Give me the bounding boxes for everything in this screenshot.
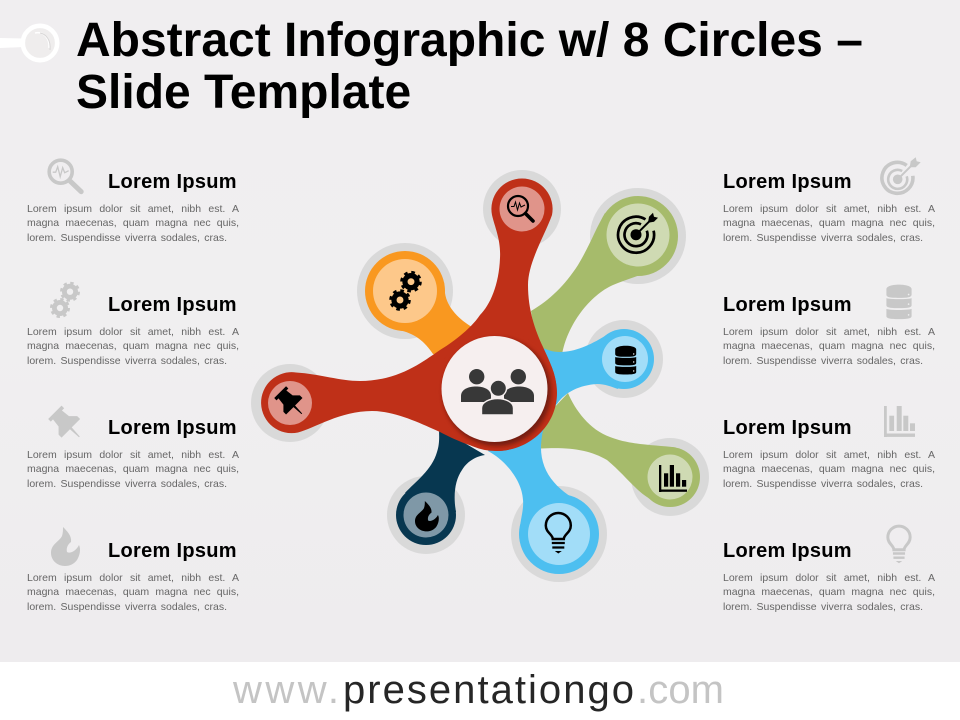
heading: Lorem Ipsum	[723, 540, 852, 562]
arm: green target	[531, 196, 678, 370]
panel: left item 3	[27, 406, 239, 490]
text block: magna maecenas, quam magna nec quis,	[27, 217, 239, 229]
arm: blue database	[540, 329, 654, 410]
text block: lorem. Suspendisse viverra sodales, cras.	[27, 354, 227, 366]
text block: magna maecenas, quam magna nec quis,	[723, 586, 935, 598]
icon: database	[886, 284, 912, 320]
footer: website address	[0, 662, 960, 720]
text block: Lorem ipsum dolor sit amet, nibh est. A	[27, 448, 239, 460]
text block: Lorem ipsum dolor sit amet, nibh est. A	[723, 202, 935, 214]
text block: lorem. Suspendisse viverra sodales, cras.	[723, 600, 923, 612]
heading: Lorem Ipsum	[723, 417, 852, 439]
text block: lorem. Suspendisse viverra sodales, cras.	[723, 232, 923, 244]
text block	[723, 572, 935, 612]
title	[76, 14, 863, 118]
footer: website address: .com	[637, 668, 724, 712]
heading: Lorem Ipsum	[723, 294, 852, 316]
heading: Lorem Ipsum	[723, 171, 852, 193]
text block: magna maecenas, quam magna nec quis,	[27, 586, 239, 598]
heading: Lorem Ipsum	[108, 294, 237, 316]
text block: magna maecenas, quam magna nec quis,	[27, 340, 239, 352]
panel: right item 1	[723, 158, 935, 244]
arm: navy flame	[396, 428, 485, 545]
text block: Lorem ipsum dolor sit amet, nibh est. A	[723, 326, 935, 338]
panel: left item 2	[27, 282, 239, 366]
panel: right item 4	[723, 524, 935, 612]
heading: Lorem Ipsum	[108, 171, 237, 193]
text block	[723, 202, 935, 244]
icon: pin	[48, 406, 80, 438]
center circle: team	[442, 336, 551, 446]
text block: Lorem ipsum dolor sit amet, nibh est. A	[27, 202, 239, 214]
panel: left item 1	[27, 158, 239, 244]
text block: lorem. Suspendisse viverra sodales, cras.	[723, 354, 923, 366]
halo circles	[251, 170, 709, 582]
title: Slide Template	[76, 66, 411, 118]
icon: target	[880, 158, 920, 196]
icon: gears	[50, 282, 80, 318]
text block: magna maecenas, quam magna nec quis,	[723, 217, 935, 229]
text block	[723, 448, 935, 490]
text block: Lorem ipsum dolor sit amet, nibh est. A	[723, 572, 935, 584]
text block: magna maecenas, quam magna nec quis,	[723, 463, 935, 475]
text block	[27, 326, 239, 366]
icon: magnifier ring pointer decoration	[0, 24, 60, 62]
text block	[27, 448, 239, 490]
panel: right item 2	[723, 284, 935, 366]
text block: lorem. Suspendisse viverra sodales, cras.	[27, 478, 227, 490]
heading: Lorem Ipsum	[108, 417, 237, 439]
icon: magnifier	[48, 158, 84, 194]
text block: lorem. Suspendisse viverra sodales, cras.	[723, 478, 923, 490]
text block: lorem. Suspendisse viverra sodales, cras.	[27, 600, 227, 612]
title: Abstract Infographic w/ 8 Circles –	[76, 14, 863, 66]
arm: green bar chart	[541, 393, 700, 507]
panel: right item 3	[723, 406, 935, 490]
text block	[723, 326, 935, 366]
text block: Lorem ipsum dolor sit amet, nibh est. A	[27, 326, 239, 338]
icon: bar chart	[884, 406, 915, 437]
text block: Lorem ipsum dolor sit amet, nibh est. A	[27, 572, 239, 584]
footer: website address: www.	[232, 668, 339, 712]
text block: Lorem ipsum dolor sit amet, nibh est. A	[723, 448, 935, 460]
arms: red magnifier and pin	[261, 178, 557, 451]
text block	[27, 202, 239, 244]
panel: left item 4	[27, 527, 239, 612]
icon: flame	[51, 527, 80, 566]
arm: orange gears	[365, 251, 472, 360]
icon: light bulb	[886, 524, 912, 563]
text block: magna maecenas, quam magna nec quis,	[723, 340, 935, 352]
arm: blue bulb	[488, 400, 599, 574]
footer: website address: presentationgo	[343, 668, 634, 712]
text block: magna maecenas, quam magna nec quis,	[27, 463, 239, 475]
text block: lorem. Suspendisse viverra sodales, cras.	[27, 232, 227, 244]
heading: Lorem Ipsum	[108, 540, 237, 562]
text block	[27, 572, 239, 612]
